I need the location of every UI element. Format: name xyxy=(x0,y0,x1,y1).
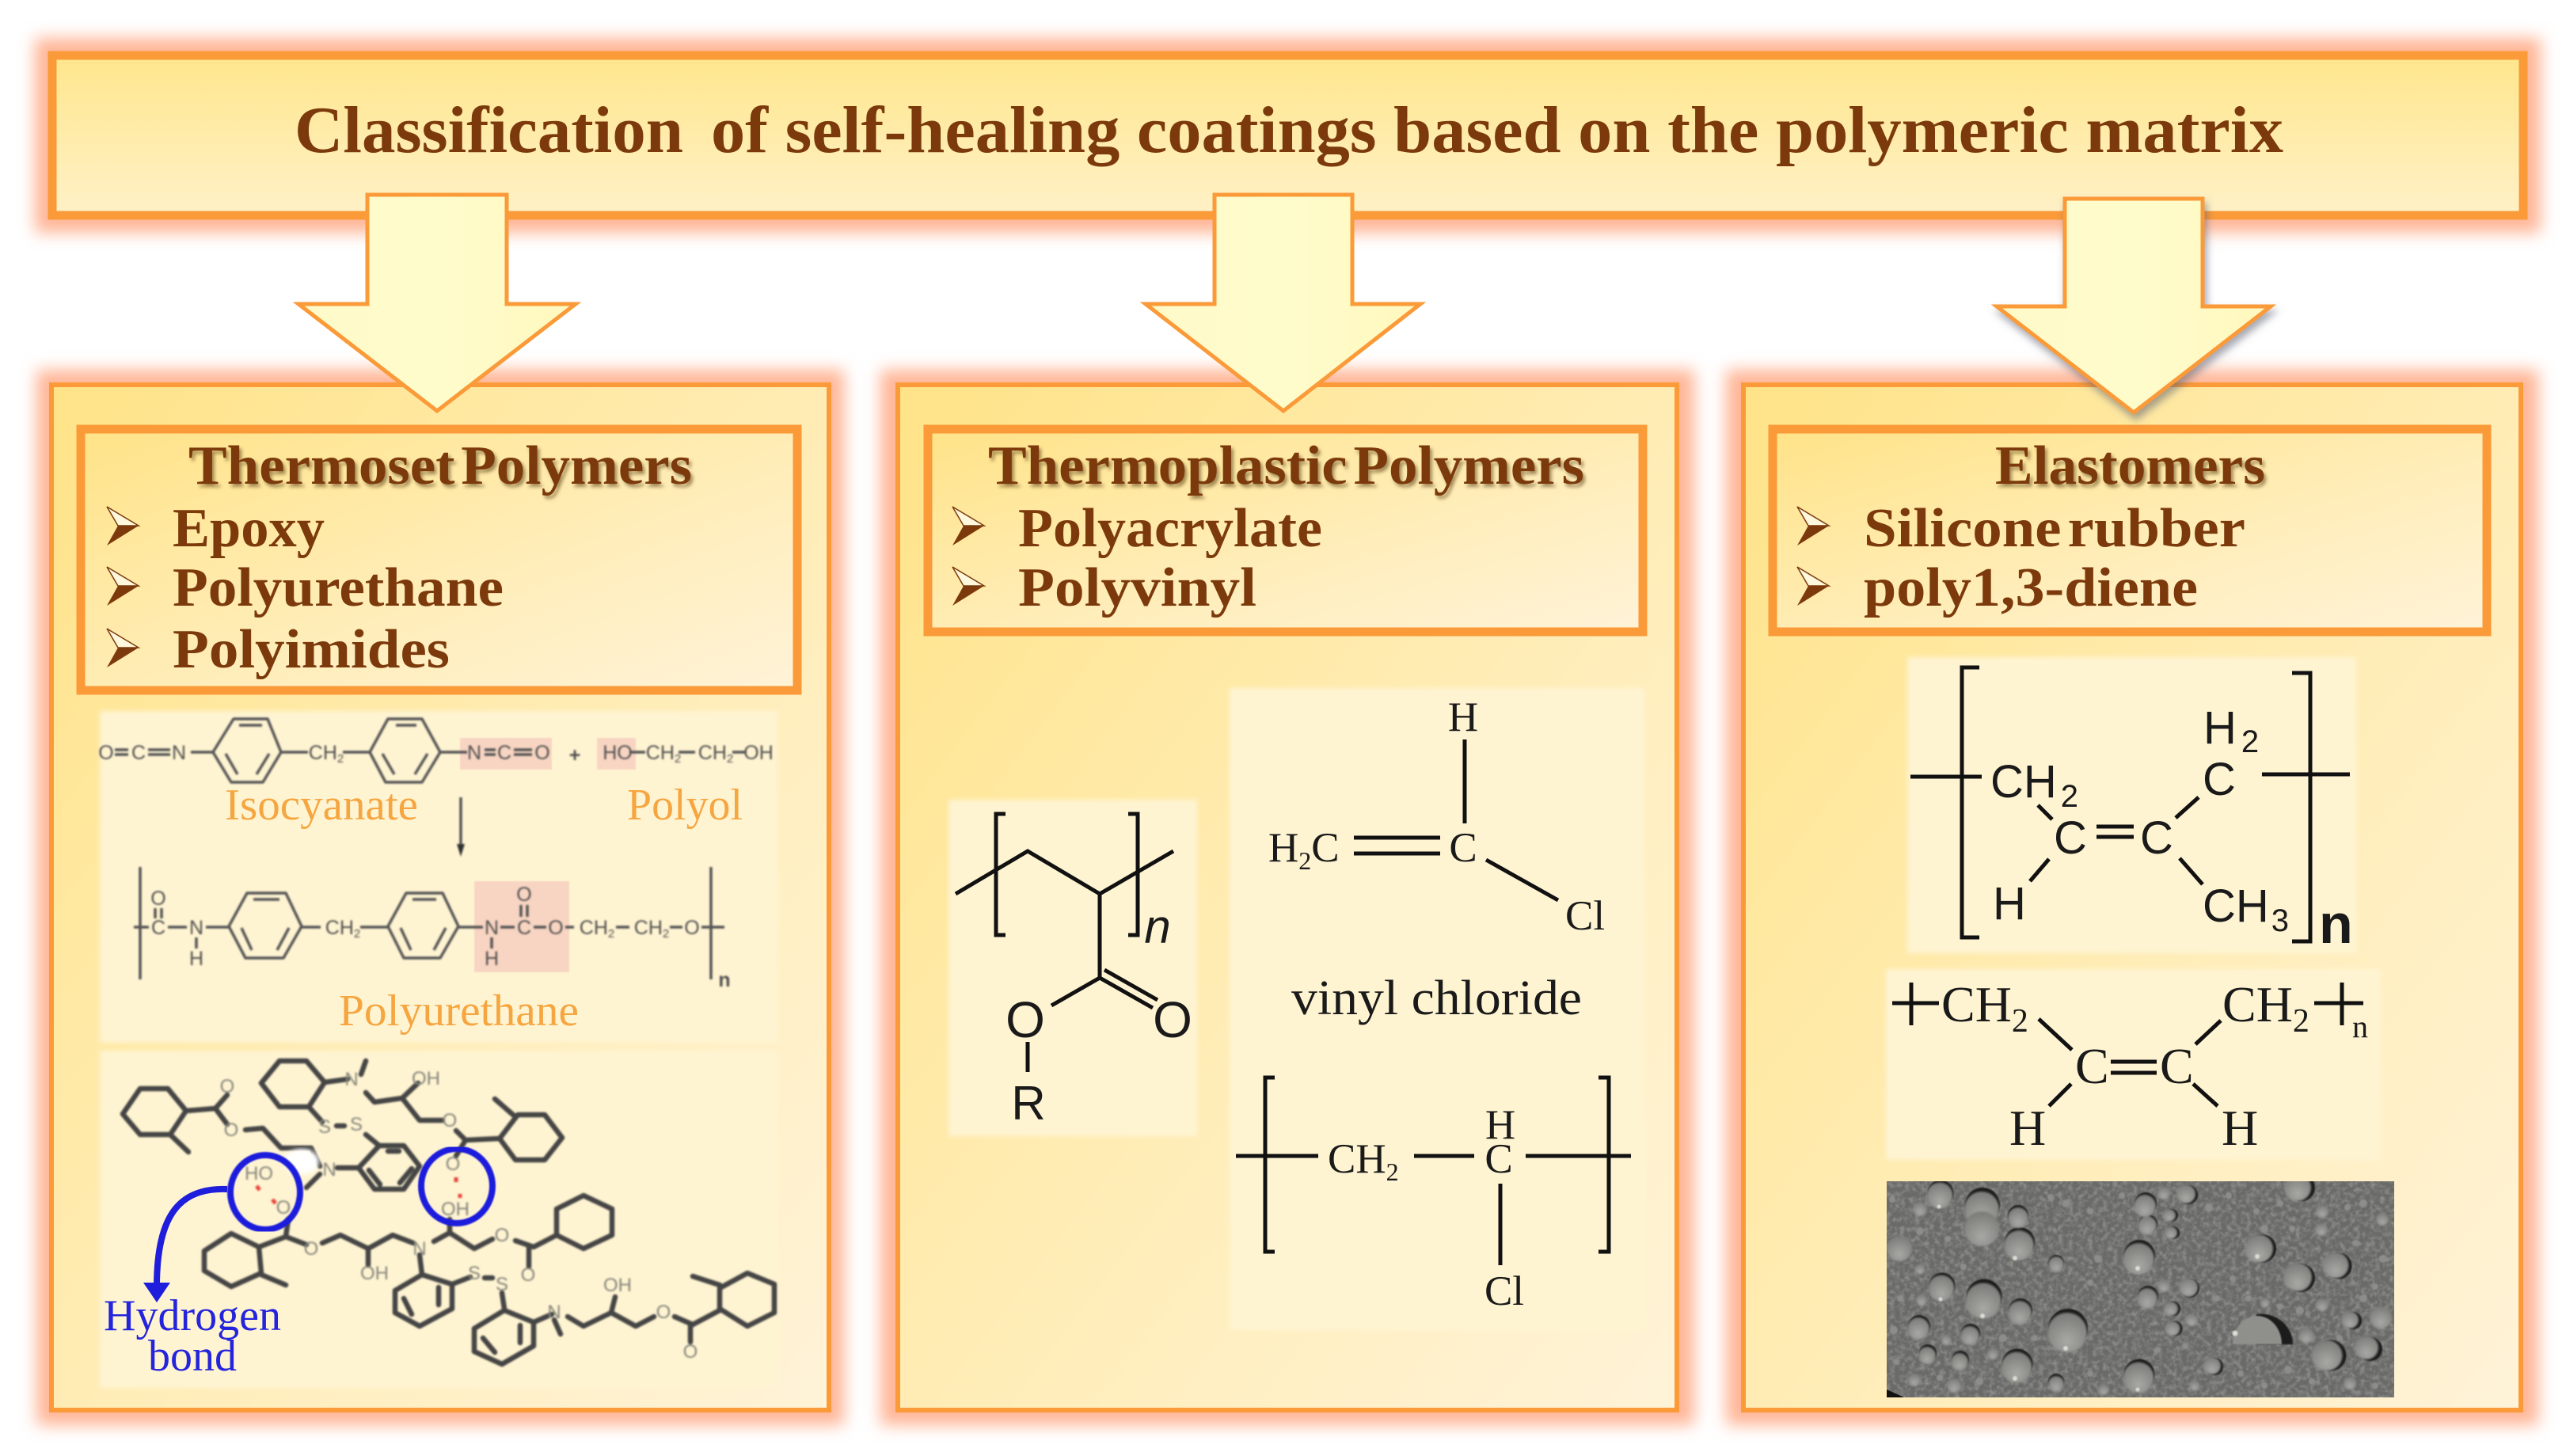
polyurethane synthesis scheme: 2 xyxy=(608,927,614,941)
silicone rubber droplets photo xyxy=(1887,1174,2394,1397)
polyurethane synthesis scheme: N xyxy=(172,742,186,764)
polyisoprene structure xyxy=(1907,657,2356,955)
polybutadiene structure: H xyxy=(2009,1100,2046,1156)
arrow: hydrogen bond pointer xyxy=(143,1189,227,1302)
polyurethane synthesis scheme: O xyxy=(548,917,564,939)
polyurethane synthesis scheme: N xyxy=(189,917,203,939)
thermoplastic list box: Thermoplastic Polymers xyxy=(988,435,1584,496)
elastomers list box: Elastomers xyxy=(1995,435,2265,496)
polyurethane synthesis scheme: N xyxy=(467,742,481,764)
arrow: title to thermoplastic polymers xyxy=(1146,195,1420,411)
polyisoprene structure: 2 xyxy=(2241,724,2259,759)
polyurethane synthesis scheme: HO xyxy=(603,742,633,764)
thermoplastic list box xyxy=(928,429,1643,632)
polyurethane synthesis scheme: 2 xyxy=(354,927,360,941)
polyurethane synthesis scheme: C xyxy=(151,917,165,939)
arrow: title to thermoset polymers xyxy=(298,195,576,411)
hydrogen bond epoxy network: S xyxy=(468,1263,481,1284)
polyisoprene structure: H xyxy=(2203,702,2237,754)
vinyl chloride and polyvinyl chloride structures: 2 xyxy=(1386,1158,1399,1186)
thermoplastic list box: Polyvinyl xyxy=(1018,557,1256,618)
polyisoprene structure: 2 xyxy=(2061,779,2078,814)
polyacrylate structure xyxy=(948,800,1197,1136)
hydrogen bond epoxy network: O xyxy=(446,1154,460,1175)
polyurethane synthesis scheme: CH xyxy=(580,917,608,939)
vinyl chloride and polyvinyl chloride structures: Cl xyxy=(1484,1268,1524,1314)
vinyl chloride and polyvinyl chloride structures xyxy=(1230,688,1644,1330)
polyurethane synthesis scheme: C xyxy=(497,742,511,764)
polyacrylate structure: O xyxy=(1153,991,1192,1048)
polybutadiene structure: C xyxy=(2075,1038,2109,1094)
polybutadiene structure: CH xyxy=(1941,976,2012,1032)
polyisoprene structure: 3 xyxy=(2271,903,2289,938)
polyurethane synthesis scheme: C xyxy=(131,742,146,764)
polyurethane synthesis scheme: OH xyxy=(743,742,774,764)
vinyl chloride label: vinyl chloride xyxy=(1291,971,1582,1025)
polyacrylate structure: n xyxy=(1144,900,1171,953)
hydrogen bond epoxy network: S xyxy=(350,1114,363,1135)
hydrogen bond epoxy network: N xyxy=(344,1069,359,1090)
hydrogen bond epoxy network: O xyxy=(443,1110,457,1131)
hydrogen bond epoxy network: HO xyxy=(245,1163,273,1184)
polybutadiene structure: C xyxy=(2160,1038,2194,1094)
polyisoprene structure: H xyxy=(1993,878,2026,929)
polyacrylate structure: O xyxy=(1005,991,1045,1048)
hydrogen bond epoxy network: OH xyxy=(412,1068,440,1089)
polyisoprene structure: n xyxy=(2319,893,2353,955)
polyurethane synthesis scheme: Isocyanate xyxy=(225,781,418,830)
polyurethane synthesis scheme: C xyxy=(517,917,531,939)
polyurethane synthesis scheme: 2 xyxy=(675,752,681,766)
hydrogen bond epoxy network: S xyxy=(496,1274,508,1295)
vinyl chloride and polyvinyl chloride structures: H xyxy=(1448,694,1478,740)
vinyl chloride and polyvinyl chloride structures: C xyxy=(1311,825,1340,871)
hydrogen bond epoxy network: bond xyxy=(148,1332,237,1381)
hydrogen bond epoxy network: OH xyxy=(441,1199,469,1220)
arrow: title to elastomers xyxy=(1997,199,2271,412)
polyurethane synthesis scheme xyxy=(98,711,777,1043)
hydrogen bond epoxy network: S xyxy=(318,1116,331,1138)
polyurethane synthesis scheme: 2 xyxy=(337,752,344,766)
polyurethane synthesis scheme: O xyxy=(98,742,114,764)
hydrogen bond epoxy network: O xyxy=(495,1225,509,1246)
vinyl chloride and polyvinyl chloride structures: H xyxy=(1268,825,1298,871)
vinyl chloride and polyvinyl chloride structures: H xyxy=(1485,1102,1515,1148)
polyurethane synthesis scheme: N xyxy=(485,917,499,939)
polyisoprene structure: CH xyxy=(1990,756,2057,808)
polybutadiene structure: 2 xyxy=(2012,1003,2028,1040)
title banner: Classification xyxy=(295,93,683,167)
polyurethane synthesis scheme: CH xyxy=(309,742,337,764)
hydrogen bond epoxy network: O xyxy=(304,1238,318,1260)
hydrogen bond epoxy network: N xyxy=(547,1302,561,1323)
polybutadiene structure: CH xyxy=(2222,976,2293,1032)
vinyl chloride and polyvinyl chloride structures: 2 xyxy=(1298,846,1311,875)
polyurethane synthesis scheme: O xyxy=(150,888,166,910)
thermoset list box: Epoxy xyxy=(173,498,325,559)
polyurethane synthesis scheme: CH xyxy=(325,917,354,939)
hydrogen bond label: Hydrogen xyxy=(104,1291,281,1340)
polyisoprene structure: CH xyxy=(2203,880,2269,932)
polyurethane synthesis scheme: CH xyxy=(646,742,675,764)
hydrogen bond epoxy network: O xyxy=(224,1120,238,1141)
thermoset list box: Thermoset Polymers xyxy=(188,435,692,496)
polybutadiene structure xyxy=(1886,969,2381,1160)
polyacrylate structure: R xyxy=(1011,1077,1046,1130)
hydrogen bond epoxy network: O xyxy=(276,1197,291,1218)
polyurethane synthesis scheme: O xyxy=(516,884,532,906)
polyurethane synthesis scheme: 2 xyxy=(727,752,733,766)
vinyl chloride and polyvinyl chloride structures: Cl xyxy=(1565,893,1605,939)
hydrogen bond epoxy network: N xyxy=(412,1238,427,1260)
hydrogen bond epoxy network xyxy=(100,1051,777,1388)
polyurethane synthesis scheme: H xyxy=(485,948,499,970)
polybutadiene structure: 2 xyxy=(2293,1003,2309,1040)
thermoplastic list box: Polyacrylate xyxy=(1018,498,1322,559)
hydrogen bond epoxy network: O xyxy=(521,1264,535,1286)
polyurethane synthesis scheme: Polyol xyxy=(627,781,743,830)
vinyl chloride and polyvinyl chloride structures: CH xyxy=(1328,1136,1386,1182)
vinyl chloride and polyvinyl chloride structures: C xyxy=(1449,825,1477,871)
thermoset list box: Polyimides xyxy=(173,619,450,680)
polyisoprene structure: C xyxy=(2203,754,2236,805)
polyurethane synthesis scheme: Polyurethane xyxy=(339,987,579,1036)
thermoset list box: Polyurethane xyxy=(173,557,504,618)
polyurethane synthesis scheme: O xyxy=(684,917,700,939)
thermoset list box xyxy=(81,429,797,690)
hydrogen bond epoxy network: OH xyxy=(603,1275,632,1296)
polyisoprene structure: C xyxy=(2140,812,2173,864)
polyurethane synthesis scheme: 2 xyxy=(663,927,669,941)
hydrogen bond epoxy network: N xyxy=(322,1159,336,1180)
title banner: of self-healing coatings based on the polymeric matrix xyxy=(711,93,2283,167)
polyurethane synthesis scheme: CH xyxy=(698,742,727,764)
polyurethane synthesis scheme: n xyxy=(718,969,731,991)
polyurethane synthesis scheme: + xyxy=(569,744,580,766)
polybutadiene structure: H xyxy=(2222,1100,2258,1156)
hydrogen bond epoxy network: O xyxy=(220,1076,234,1097)
elastomers list box: poly1,3-diene xyxy=(1864,557,2198,618)
polyurethane synthesis scheme: H xyxy=(189,948,203,970)
elastomers list box: Silicone rubber xyxy=(1864,498,2245,559)
polyurethane synthesis scheme: CH xyxy=(634,917,663,939)
hydrogen bond epoxy network: OH xyxy=(360,1263,389,1284)
polybutadiene structure: n xyxy=(2352,1009,2368,1044)
hydrogen bond epoxy network: O xyxy=(683,1341,698,1363)
polyurethane synthesis scheme: O xyxy=(534,742,550,764)
vinyl chloride and polyvinyl chloride structures: C xyxy=(1484,1136,1513,1182)
elastomers list box xyxy=(1773,429,2487,632)
panel: thermoset polymers xyxy=(36,370,844,1425)
polyisoprene structure: C xyxy=(2054,812,2087,864)
panel: elastomers xyxy=(1726,370,2538,1425)
hydrogen bond epoxy network: O xyxy=(656,1302,671,1323)
title banner xyxy=(35,38,2541,233)
panel: thermoplastic polymers xyxy=(880,370,1694,1425)
blue hydrogen bond circles xyxy=(230,1149,492,1230)
